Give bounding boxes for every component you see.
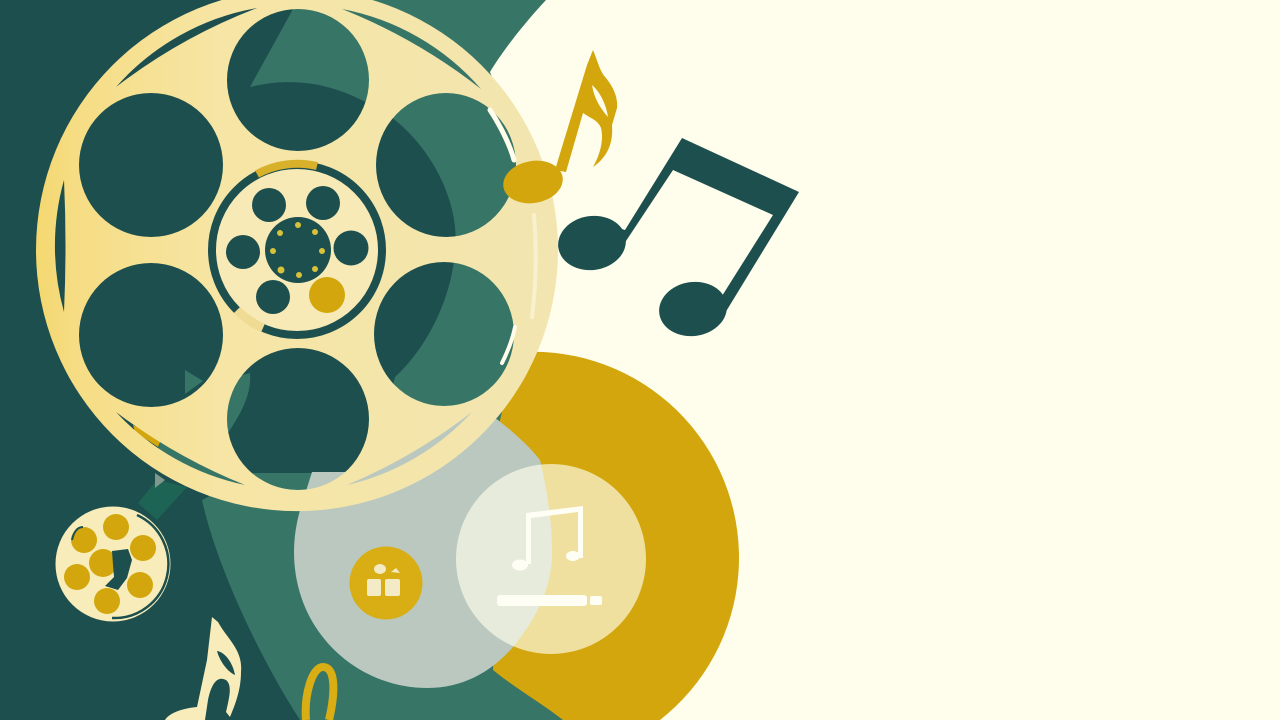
mid teal slivers behind reel holes <box>158 370 250 490</box>
dark teal beamed notes <box>555 138 799 340</box>
grey circle <box>294 406 552 688</box>
small reel hub marking <box>105 549 132 590</box>
dark teal background shape <box>0 0 456 720</box>
gold patch behind lower-left slot <box>133 425 162 447</box>
pale grey fleck <box>155 473 165 488</box>
hub spindle holes <box>226 186 368 314</box>
small reel dark fleck <box>72 527 83 540</box>
small gold badge <box>350 546 422 620</box>
icon: white music note <box>512 506 583 570</box>
gold hub hole <box>309 277 345 313</box>
film reel <box>36 0 558 511</box>
reel disc with holes and slots <box>36 0 558 511</box>
pale slivers on right rim <box>490 110 536 363</box>
gold music note <box>500 50 617 208</box>
small film reel <box>56 506 170 622</box>
hub centre dots <box>270 222 325 278</box>
cream music note, bottom <box>165 617 241 720</box>
icon: badge glyph <box>367 564 400 596</box>
pale overlay circle <box>456 464 646 654</box>
mid teal background shape <box>180 0 563 720</box>
gold arcs on hub ring <box>257 164 317 174</box>
gold treble loop, bottom <box>306 667 333 720</box>
small reel gold holes <box>64 514 156 614</box>
small reel rim arc <box>112 515 168 618</box>
white progress bar <box>497 595 602 606</box>
note flag gap <box>592 85 608 117</box>
hub ring <box>212 165 382 335</box>
green stem of small reel <box>138 480 187 520</box>
hub interior <box>215 168 379 332</box>
large gold circle <box>327 352 739 720</box>
